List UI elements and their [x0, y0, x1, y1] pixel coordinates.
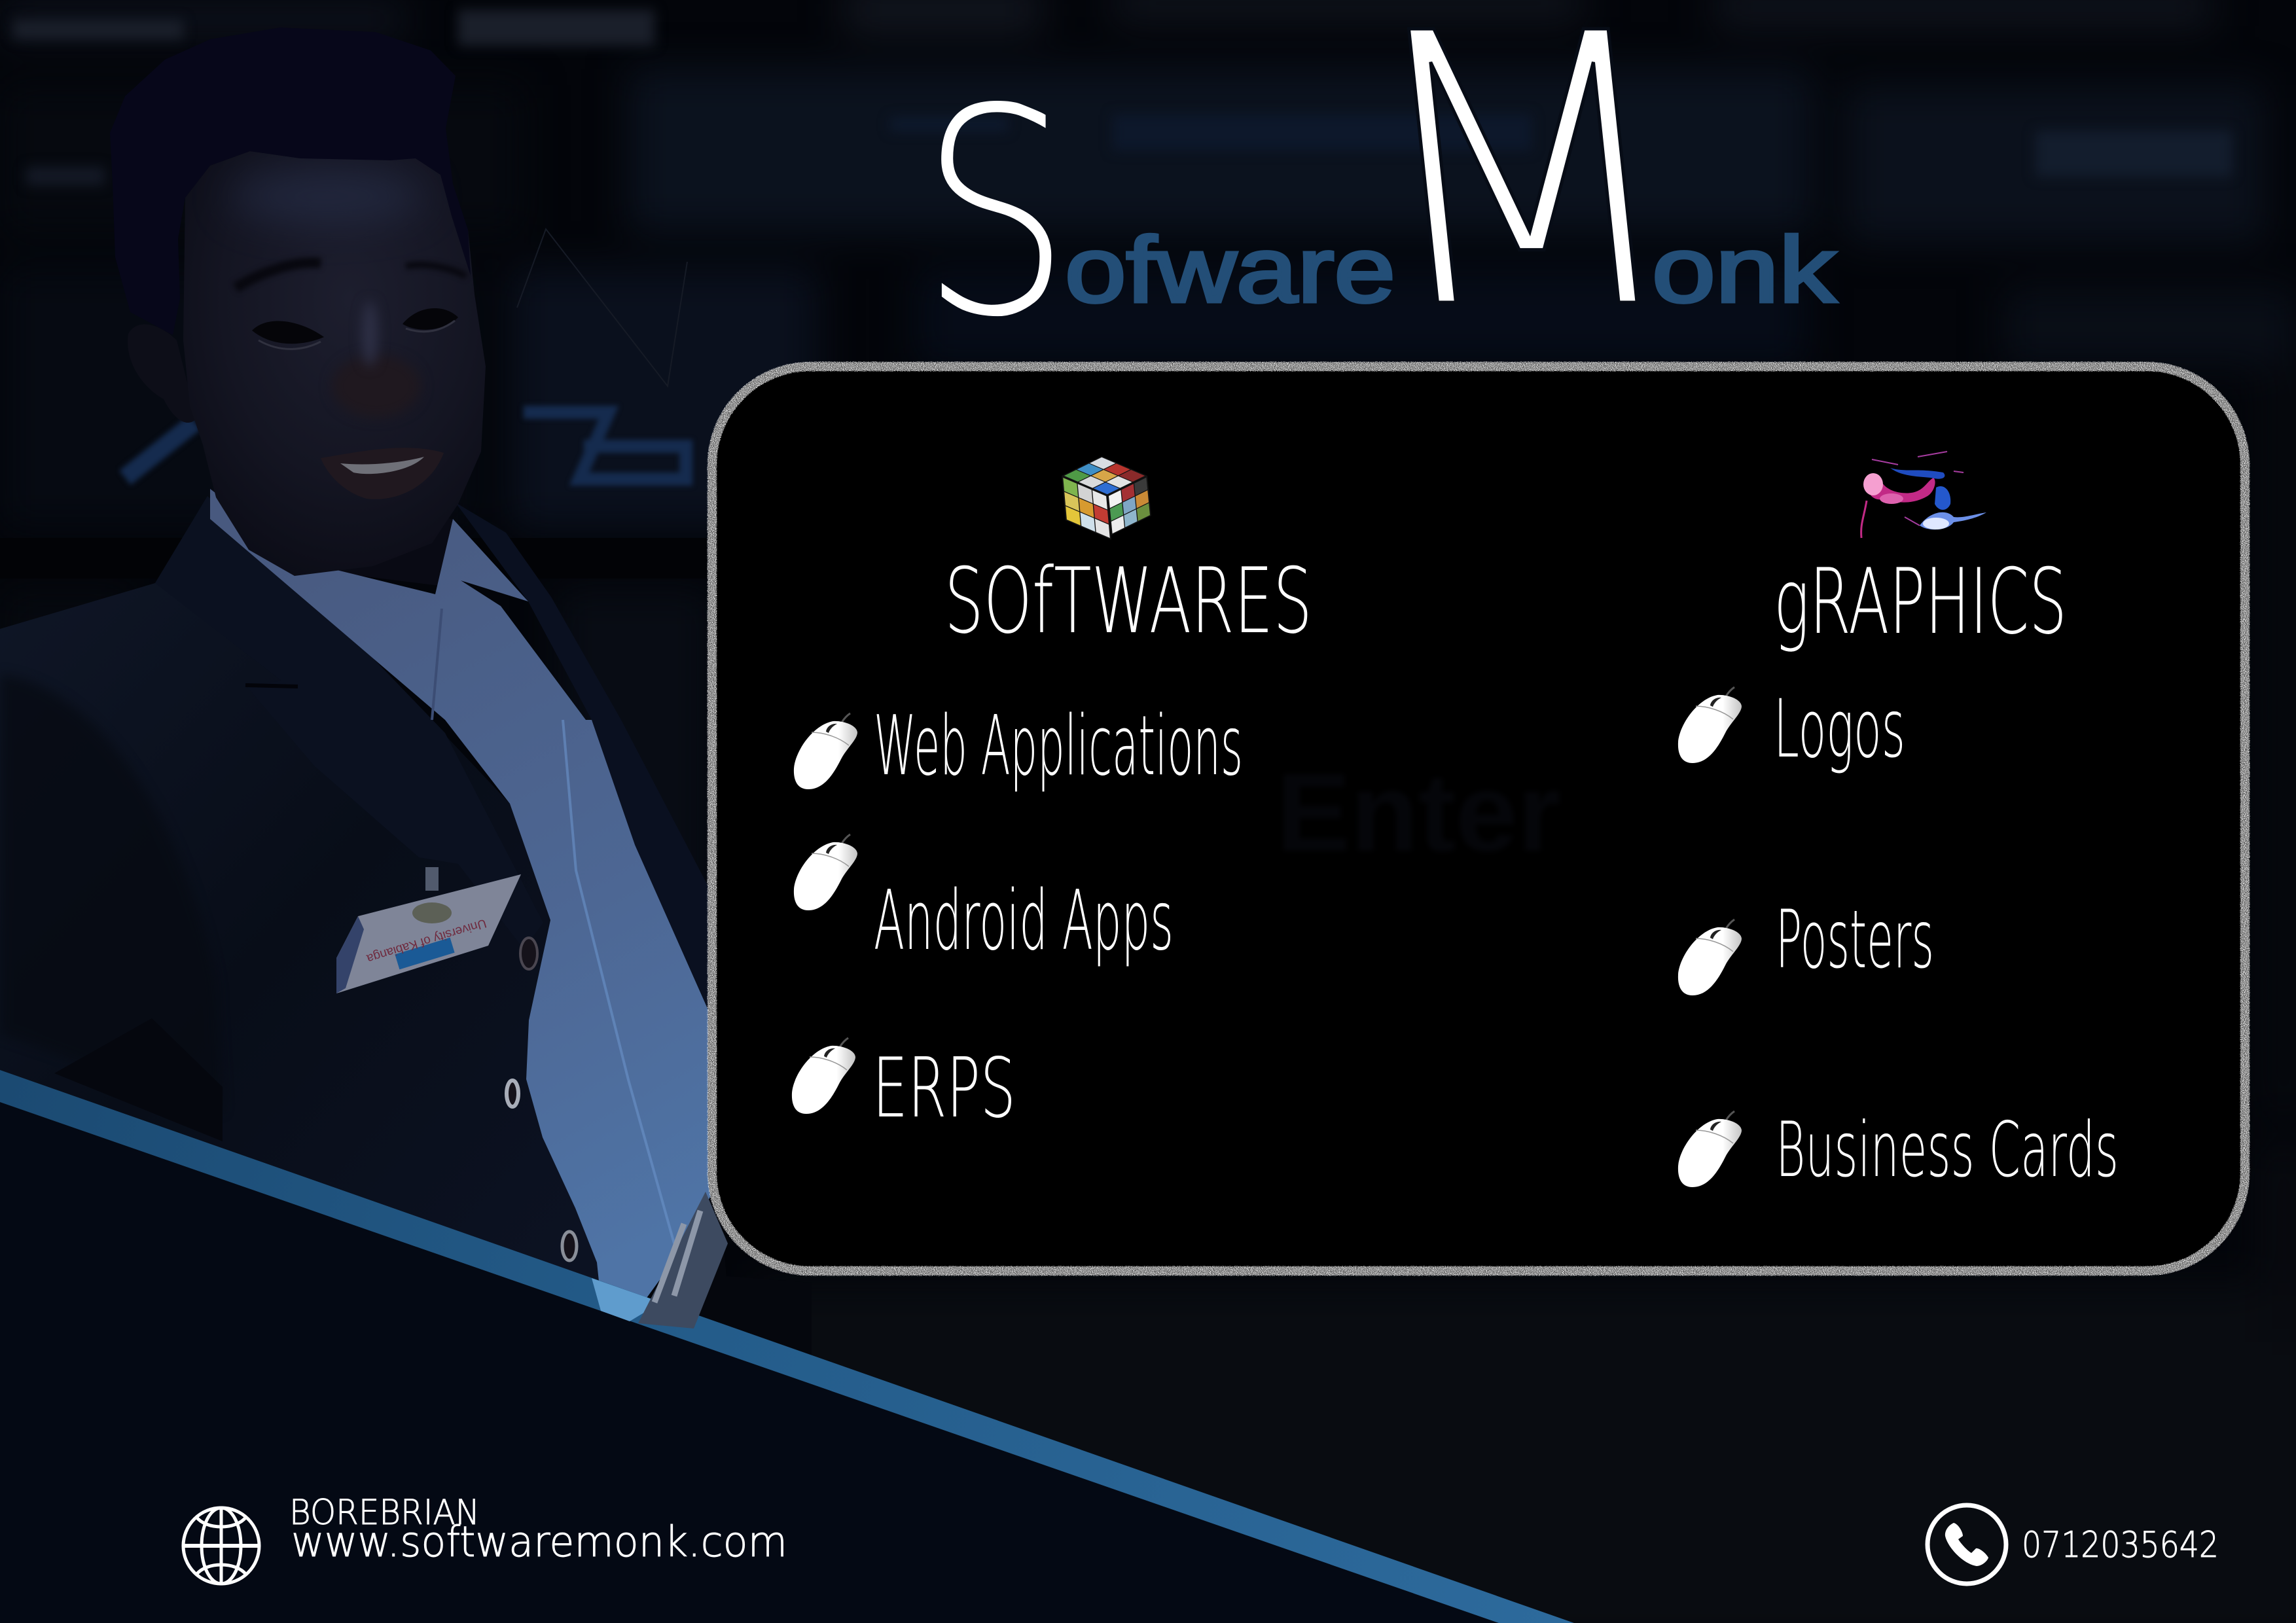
bullet: erps [792, 1038, 1016, 1136]
lapel [155, 496, 543, 949]
belt buckle [638, 1192, 728, 1329]
heading: graphics: gRAPHICS [1774, 549, 2067, 654]
column: graphics [1678, 452, 2119, 1194]
eyes [252, 321, 324, 344]
title: ofware: ofware [1065, 218, 1395, 322]
url: www.softwaremonk.com [291, 1518, 787, 1567]
column: softwares [792, 456, 1312, 1136]
bullet: android apps: Android Apps [874, 872, 1174, 969]
bullet: android apps [794, 834, 1174, 969]
footer: website [183, 1493, 787, 1584]
icon: phone [1928, 1505, 2006, 1584]
dark diagonal footer panel [0, 1102, 1499, 1623]
bullet: logos: Logos [1774, 683, 1905, 776]
title: large S: S [920, 48, 1071, 380]
jacket [0, 496, 609, 1322]
face [183, 151, 486, 576]
bullet: posters [1678, 893, 1934, 995]
name: BOREBRIAN [289, 1493, 480, 1533]
bullet: posters: Posters [1776, 893, 1934, 986]
bullet: logos [1678, 683, 1905, 776]
jacket lower right [687, 1139, 812, 1381]
bullet: erps: ERPS [872, 1040, 1016, 1136]
lapel crease [245, 685, 298, 687]
gap between arm and body [54, 1018, 223, 1141]
phone number: 0712035642 [2022, 1524, 2219, 1565]
title: onk: onk [1652, 218, 1837, 322]
footer: phone [1928, 1505, 2219, 1584]
shirt [210, 489, 713, 1321]
blue diagonal band [0, 1070, 1574, 1623]
panel: services [712, 366, 2245, 1271]
arm shading [0, 674, 223, 1113]
title [920, 0, 1837, 391]
jacket buttons [507, 938, 577, 1260]
forehead highlight [229, 170, 425, 223]
nose [332, 355, 421, 418]
icon: paint splash [1861, 452, 1986, 538]
shirt placket [563, 720, 674, 1243]
shirt seen through blue band [592, 1278, 661, 1321]
blurred key legends [13, 10, 2232, 185]
mouth [321, 448, 444, 499]
hair [110, 27, 471, 335]
eyebrows [236, 262, 466, 288]
heading: softwares: SOfTWARES [944, 548, 1312, 654]
faint Enter key ghost inside panel: Enter [1276, 751, 1561, 875]
ID badge: University of Kabianga [365, 916, 488, 965]
icon: app rubik cube [1062, 456, 1151, 540]
neck [210, 489, 465, 589]
jacket right side [456, 503, 713, 1021]
ID badge [336, 867, 521, 993]
ear [128, 325, 196, 423]
icon: globe [183, 1508, 259, 1584]
shirt collar shadow line [432, 609, 442, 720]
bullet: business cards [1678, 1106, 2119, 1194]
bullet: web applications: Web Applications [874, 698, 1243, 794]
bullet: web applications [794, 698, 1243, 794]
person portrait [0, 27, 812, 1381]
